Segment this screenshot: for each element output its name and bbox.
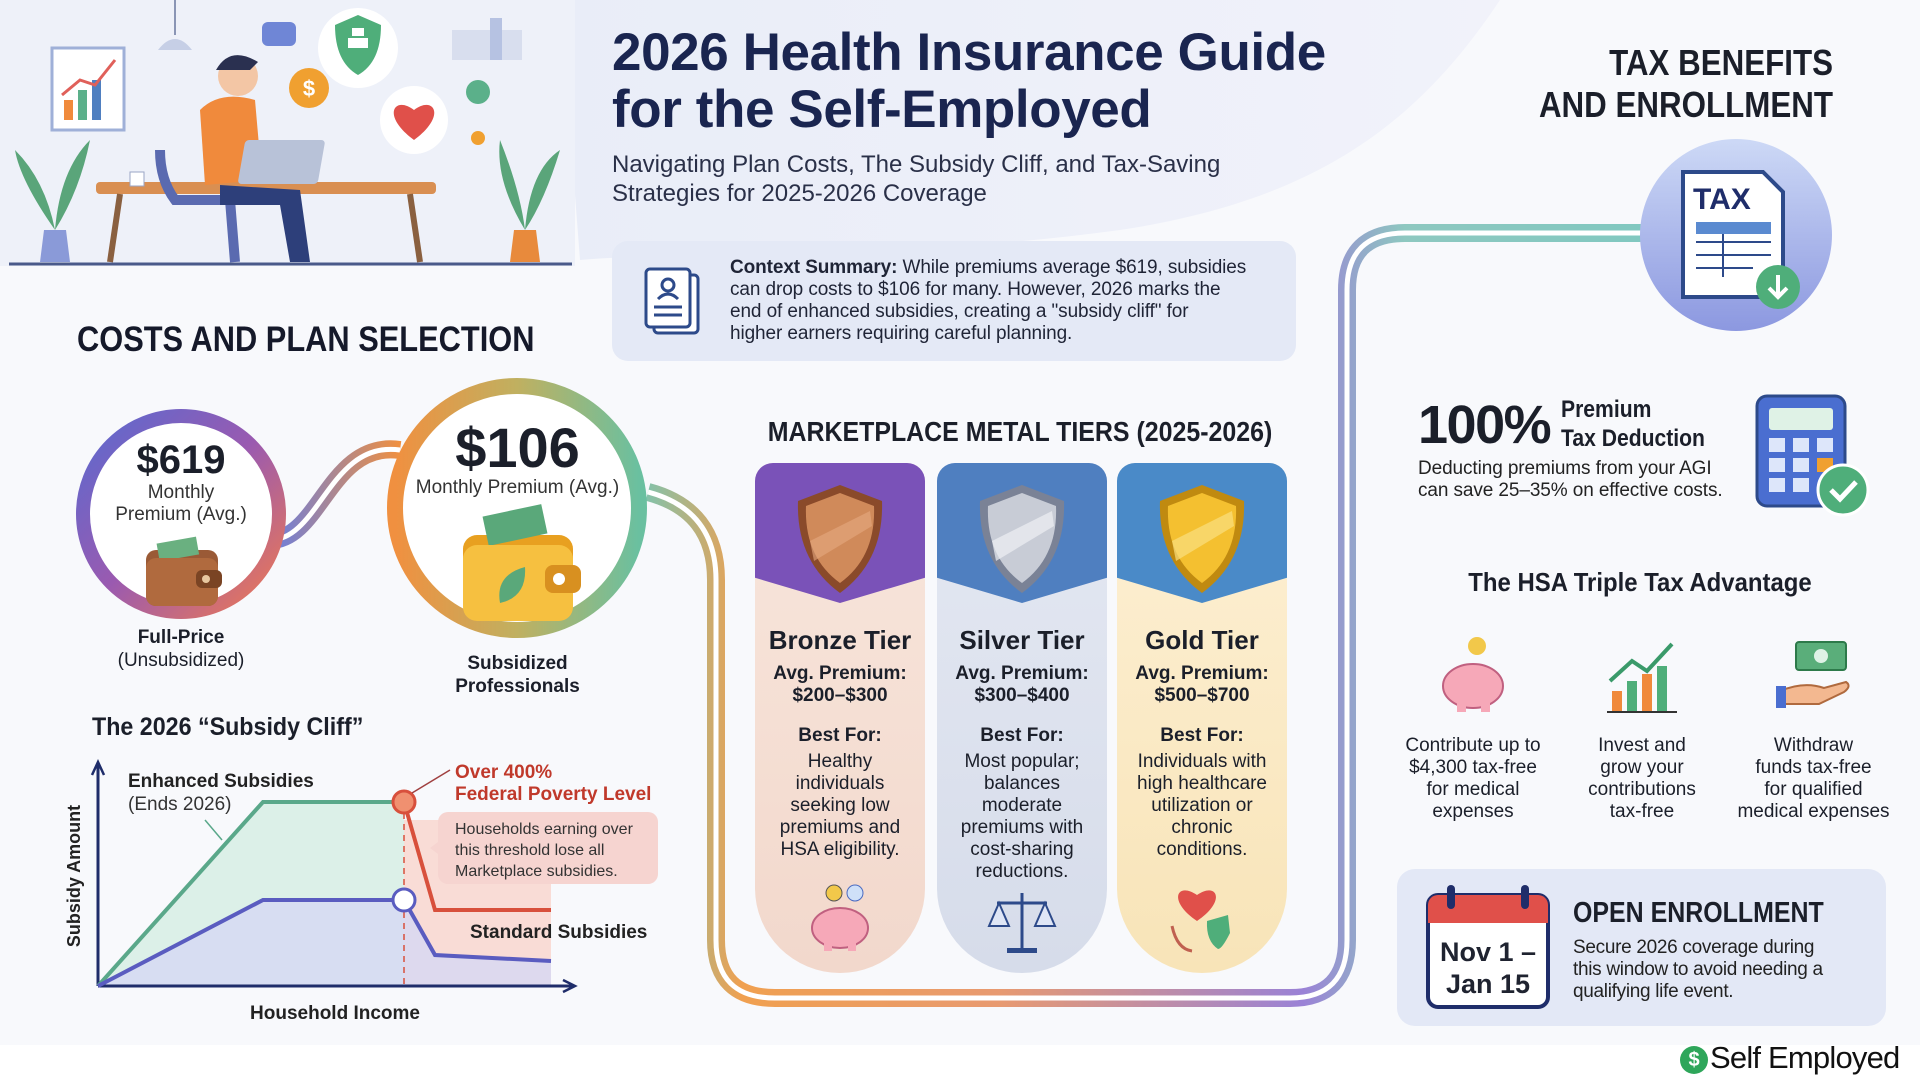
panel: gold tier — [1117, 463, 1287, 973]
icon: hand with cash — [1776, 641, 1850, 708]
logo: Self Employed: Self Employed — [1710, 1040, 1899, 1075]
HSA item: withdraw: medical expenses — [1737, 801, 1890, 822]
panel: full price circle — [76, 409, 286, 671]
panel: open enrollment: this window to avoid needing a — [1573, 959, 1823, 980]
context text: higher earners requiring careful planning. — [730, 323, 1072, 344]
HSA item: withdraw: Withdraw — [1774, 735, 1853, 756]
panel: subsidized circle: Monthly Premium (Avg.) — [416, 477, 619, 498]
stat: 100% premium deduction: Deducting premiums from your AGI — [1418, 458, 1712, 479]
icon: gold shield — [1160, 485, 1244, 593]
title: for the Self-Employed — [612, 80, 1151, 139]
HSA item: invest: tax-free — [1610, 801, 1674, 822]
heading: tax benefits: AND ENROLLMENT — [1539, 84, 1833, 125]
panel: full price circle: Premium (Avg.) — [115, 504, 247, 525]
panel: full price circle: $619 — [136, 438, 225, 482]
heading: costs and plan selection: COSTS AND PLAN SELECTION — [77, 320, 534, 359]
panel: bronze tier: individuals — [796, 773, 884, 794]
context summary box — [612, 241, 1296, 361]
icon: yellow wallet — [463, 504, 581, 621]
panel: bronze tier: Best For: — [798, 725, 882, 746]
stat: 100% premium deduction: can save 25–35% on effective costs. — [1418, 480, 1723, 501]
icon: growth chart — [1607, 642, 1677, 713]
panel: subsidized circle: Professionals — [455, 676, 580, 697]
panel: bronze tier: Bronze Tier — [769, 625, 911, 655]
chart: subsidy cliff — [64, 759, 658, 1024]
panel: silver tier: cost-sharing — [970, 839, 1074, 860]
HSA item: invest: grow your — [1600, 757, 1684, 778]
illustration: self-employed person at desk: $ — [303, 76, 315, 101]
panel: silver tier: Best For: — [980, 725, 1064, 746]
callout: cliff note: this threshold lose all — [455, 842, 604, 859]
panel: bronze tier: $200–$300 — [792, 685, 888, 706]
panel: gold tier: high healthcare — [1137, 773, 1267, 794]
callout: cliff note: Households earning over — [455, 821, 634, 838]
panel: open enrollment — [1397, 869, 1886, 1026]
panel: gold tier: Individuals with — [1138, 751, 1266, 772]
panel: gold tier: Best For: — [1160, 725, 1244, 746]
panel: subsidized circle: Subsidized — [467, 653, 568, 674]
panel: full price circle: Monthly — [148, 482, 214, 503]
chart: subsidy cliff: Subsidy Amount — [64, 805, 84, 947]
chart: subsidy cliff: Federal Poverty Level — [455, 784, 651, 805]
heading: HSA triple tax advantage: The HSA Triple Tax Advantage — [1468, 567, 1812, 597]
panel: open enrollment: qualifying life event. — [1573, 981, 1733, 1002]
heading: subsidy cliff: The 2026 “Subsidy Cliff” — [92, 713, 363, 741]
panel: full price circle: Full-Price — [138, 627, 224, 648]
HSA item: contribute: $4,300 tax-free — [1409, 757, 1537, 778]
panel: silver tier: Most popular; — [964, 751, 1080, 772]
context text: Context Summary: While premiums average $619, subsidies — [730, 257, 1246, 278]
chart: subsidy cliff: Enhanced Subsidies — [128, 771, 314, 792]
icon: heart hand shield — [1170, 890, 1230, 952]
chart: subsidy cliff: (Ends 2026) — [128, 794, 232, 815]
panel: silver tier: reductions. — [976, 861, 1068, 882]
panel: bronze tier: Avg. Premium: — [773, 663, 907, 684]
HSA item: contribute — [1405, 637, 1541, 822]
chart: subsidy cliff: Standard Subsidies — [470, 922, 647, 943]
icon: calendar: Nov 1 – — [1440, 937, 1536, 967]
stat: 100% premium deduction: 100% — [1418, 395, 1550, 455]
callout: cliff note — [430, 812, 658, 884]
icon: document profile — [644, 268, 700, 334]
icon: bronze shield — [798, 485, 882, 593]
panel: open enrollment: OPEN ENROLLMENT — [1573, 897, 1824, 929]
subtitle — [612, 151, 1220, 207]
heading: metal tiers: MARKETPLACE METAL TIERS (2025-2026) — [768, 416, 1272, 447]
chart: subsidy cliff: Household Income — [250, 1003, 420, 1024]
icon: calendar: Jan 15 — [1446, 969, 1530, 999]
panel: silver tier: Silver Tier — [959, 625, 1085, 655]
heading: tax benefits — [1539, 42, 1833, 125]
context text: can drop costs to $106 for many. However, 2026 marks the — [730, 279, 1220, 300]
panel: silver tier: Avg. Premium: — [955, 663, 1089, 684]
icon: calendar — [1426, 885, 1550, 1009]
HSA item: invest — [1588, 642, 1696, 822]
icon: tax document circle — [1640, 139, 1832, 331]
panel: bronze tier — [755, 463, 925, 973]
heading: tax benefits: TAX BENEFITS — [1609, 42, 1833, 83]
context text — [730, 257, 1246, 344]
panel: gold tier: conditions. — [1157, 839, 1247, 860]
panel: bronze tier: seeking low — [790, 795, 890, 816]
panel: silver tier: $300–$400 — [974, 685, 1070, 706]
HSA item: contribute: for medical — [1427, 779, 1519, 800]
title: 2026 Health Insurance Guide — [612, 23, 1326, 82]
callout: cliff note: Marketplace subsidies. — [455, 863, 618, 880]
HSA item: invest: Invest and — [1598, 735, 1686, 756]
HSA item: withdraw: funds tax-free — [1755, 757, 1872, 778]
chart: subsidy cliff: Over 400% — [455, 762, 552, 783]
logo: Self Employed: $ — [1688, 1049, 1700, 1071]
panel: silver tier: balances — [984, 773, 1060, 794]
panel: silver tier — [937, 463, 1107, 973]
panel: gold tier: chronic — [1171, 817, 1233, 838]
stat: 100% premium deduction: Tax Deduction — [1561, 425, 1705, 452]
icon: silver shield — [980, 485, 1064, 593]
HSA item: withdraw — [1737, 641, 1890, 822]
HSA item: contribute: expenses — [1432, 801, 1514, 822]
panel: bronze tier: HSA eligibility. — [780, 839, 899, 860]
stat: 100% premium deduction — [1418, 395, 1723, 501]
panel: gold tier: utilization or — [1151, 795, 1253, 816]
panel: gold tier: $500–$700 — [1154, 685, 1250, 706]
stat: 100% premium deduction: Premium — [1561, 396, 1651, 423]
icon: calculator — [1756, 394, 1866, 514]
icon: tax document circle: TAX — [1693, 183, 1751, 216]
panel: bronze tier: Healthy — [808, 751, 872, 772]
panel: open enrollment: Secure 2026 coverage during — [1573, 937, 1814, 958]
illustration: self-employed person at desk — [0, 0, 575, 266]
panel: bronze tier: premiums and — [780, 817, 900, 838]
title — [612, 23, 1326, 139]
subtitle: Navigating Plan Costs, The Subsidy Cliff, and Tax-Saving — [612, 151, 1220, 178]
panel: gold tier: Avg. Premium: — [1135, 663, 1269, 684]
panel: gold tier: Gold Tier — [1145, 625, 1259, 655]
HSA item: contribute: Contribute up to — [1405, 735, 1541, 756]
panel: subsidized circle: $106 — [455, 416, 580, 479]
panel: silver tier: premiums with — [961, 817, 1083, 838]
icon: scales — [988, 893, 1056, 953]
icon: piggy bank coin — [1442, 637, 1504, 712]
panel: subsidized circle — [387, 378, 647, 697]
icon: piggy bank — [811, 884, 869, 951]
subtitle: Strategies for 2025-2026 Coverage — [612, 180, 987, 207]
HSA item: invest: contributions — [1588, 779, 1696, 800]
context text: end of enhanced subsidies, creating a "subsidy cliff" for — [730, 301, 1188, 322]
HSA item: withdraw: for qualified — [1764, 779, 1863, 800]
icon: brown wallet — [146, 537, 222, 606]
panel: silver tier: moderate — [982, 795, 1062, 816]
panel: full price circle: (Unsubsidized) — [118, 650, 244, 671]
